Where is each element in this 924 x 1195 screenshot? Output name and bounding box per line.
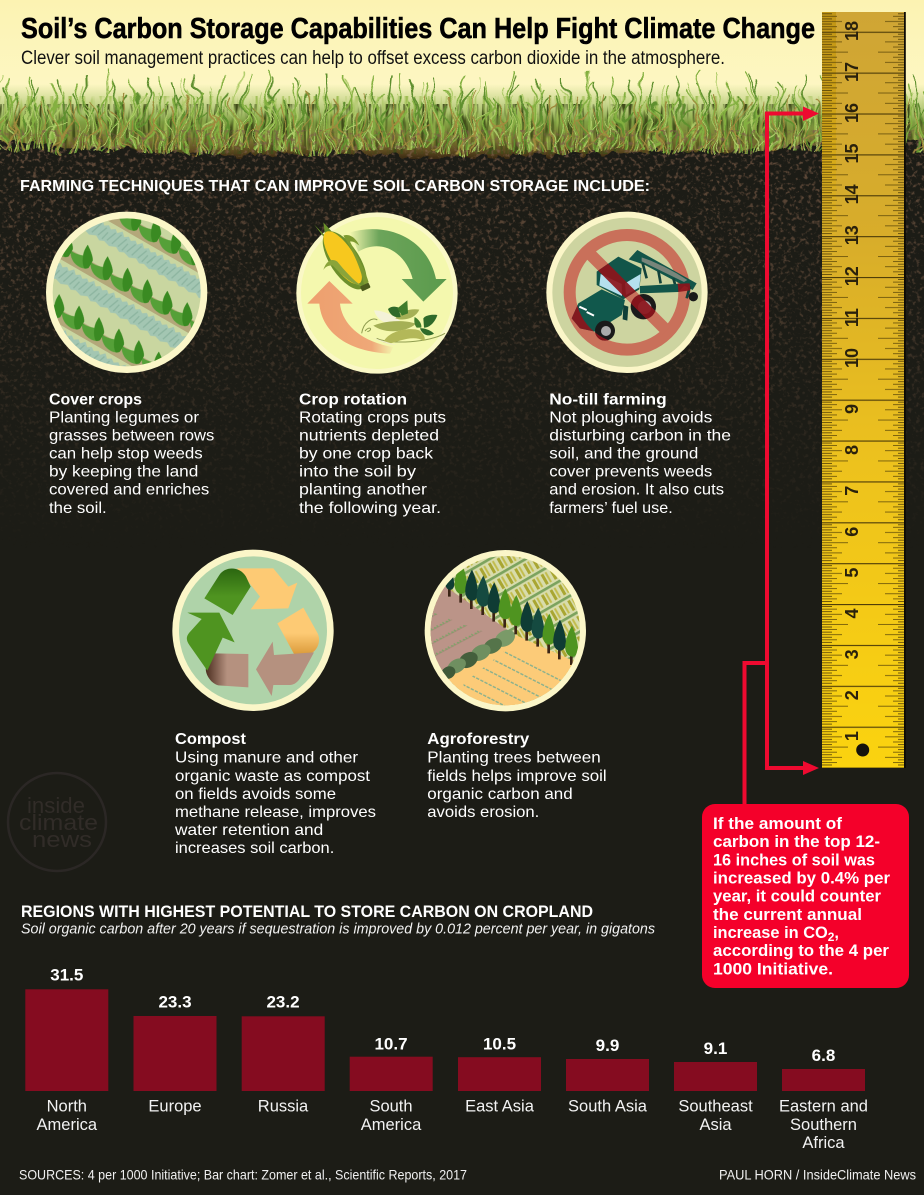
text: crop rotation: the following year.: [299, 500, 441, 517]
bar: North America: 31.5: [50, 965, 83, 984]
bar: Eastern and Southern Africa: 6.8: [812, 1046, 835, 1065]
bar: North America: America: [37, 1116, 98, 1134]
chart subtitle: Soil organic carbon after 20 years if sequestration is improved by 0.012 percent per year, in gigatons: [21, 920, 655, 937]
text: compost: on fields avoids some: [175, 786, 336, 803]
callout: 4 per 1000 Initiative: increased by 0.4% per: [713, 870, 891, 888]
callout: 4 per 1000 Initiative: [702, 804, 909, 988]
text: crop rotation: by one crop back: [299, 446, 434, 462]
text: cover crops: the soil.: [49, 500, 107, 517]
ruler numbers: 13: [842, 225, 862, 245]
sign over tractor: [572, 264, 690, 340]
text: cover crops: Planting legumes or: [49, 409, 200, 426]
icon: crop rotation: [296, 212, 458, 374]
text: no-till farming: disturbing carbon in the: [549, 427, 731, 444]
callout: 4 per 1000 Initiative: year, it could counter: [713, 888, 882, 906]
icon: cover crops: [46, 212, 207, 373]
bar: South America: 10.7: [374, 1034, 408, 1053]
bar: South Asia: South Asia: [568, 1098, 648, 1116]
bar: South Asia: 9.9: [596, 1036, 619, 1055]
bar: East Asia: 10.5: [483, 1034, 516, 1053]
sources: SOURCES: 4 per 1000 Initiative; Bar chart: Zomer et al., Scientific Reports, 2017: [19, 1166, 467, 1182]
hedge: [442, 630, 515, 679]
corn: [314, 222, 375, 296]
ruler numbers: 7: [842, 486, 862, 496]
bar: South Asia: [566, 1036, 649, 1116]
bar: East Asia: East Asia: [465, 1098, 535, 1116]
section heading: farming techniques: FARMING TECHNIQUES THAT CAN IMPROVE SOIL CARBON STORAGE INCLUDE:: [20, 178, 650, 195]
callout: 4 per 1000 Initiative: carbon in the top 12-: [713, 833, 880, 851]
text: agroforestry: Planting trees between: [427, 750, 601, 767]
bar: Eastern and Southern Africa: Southern: [790, 1116, 857, 1134]
bar: North America: North: [47, 1098, 87, 1116]
bar: East Asia: [458, 1034, 541, 1116]
ruler numbers: 14: [842, 184, 862, 204]
callout: 4 per 1000 Initiative: according to the 4 per: [713, 942, 890, 960]
text: compost: increases soil carbon.: [175, 840, 334, 857]
ruler numbers: 12: [842, 266, 862, 286]
ruler numbers: 6: [842, 527, 862, 537]
recycling piece: yellow right: [277, 608, 319, 654]
red arrows: 12-16 inch bracket: [744, 106, 819, 804]
recycling arrow: yellow top: [237, 568, 297, 609]
text: cover crops: Cover crops: [49, 391, 142, 408]
text: agroforestry: fields helps improve soil: [427, 768, 607, 785]
recycling piece: green top: [204, 568, 251, 615]
text: compost: Using manure and other: [175, 750, 359, 767]
ruler numbers: 8: [842, 445, 862, 455]
text: no-till farming: No-till farming: [549, 391, 667, 408]
green arrow: [350, 229, 447, 302]
ruler numbers: [842, 21, 862, 741]
text: crop rotation: [299, 391, 446, 517]
ruler numbers: 1: [842, 731, 862, 741]
callout: 4 per 1000 Initiative: If the amount of: [713, 815, 843, 833]
ruler numbers: 17: [842, 62, 862, 82]
bar: Russia: Russia: [258, 1098, 309, 1116]
text: crop rotation: Rotating crops puts: [299, 409, 446, 426]
ruler numbers: 15: [842, 143, 862, 164]
title: Soil’s Carbon Storage Capabilities Can Help Fight Climate Change: [21, 13, 815, 45]
text: no-till farming: soil, and the ground: [549, 446, 698, 462]
ruler numbers: 2: [842, 690, 862, 700]
text: crop rotation: planting another: [299, 482, 428, 499]
bar: Southeast Asia: Southeast: [678, 1098, 753, 1116]
orange arrow: [307, 281, 393, 354]
text: cover crops: [49, 391, 214, 517]
bar: Eastern and Southern Africa: Eastern and: [779, 1098, 868, 1116]
icon: compost: [172, 550, 334, 711]
callout: 4 per 1000 Initiative: increase in CO: [713, 924, 829, 942]
ruler numbers: 9: [842, 404, 862, 414]
text: no-till farming: farmers’ fuel use.: [549, 500, 673, 517]
text: agroforestry: avoids erosion.: [427, 804, 539, 821]
ruler numbers: 5: [842, 568, 862, 578]
ruler numbers: 18: [842, 21, 862, 41]
recycling arrow: tan lower: [256, 642, 314, 696]
bar: Europe: Europe: [148, 1098, 202, 1116]
text: agroforestry: Agroforestry: [427, 731, 529, 748]
text: compost: Compost: [175, 731, 247, 748]
ruler numbers: 10: [842, 348, 862, 368]
bar: Southeast Asia: Asia: [699, 1116, 732, 1134]
ruler numbers: 4: [842, 608, 862, 618]
bar chart: [25, 965, 868, 1152]
text: compost: [174, 731, 376, 857]
text: cover crops: covered and enriches: [49, 482, 209, 499]
text: crop rotation: Crop rotation: [299, 391, 407, 408]
text: compost: organic waste as compost: [175, 768, 371, 785]
text: cover crops: grasses between rows: [49, 427, 214, 444]
text: compost: methane release, improves: [175, 804, 376, 821]
bar: South America: South: [369, 1098, 413, 1116]
callout: 4 per 1000 Initiative: 1000 Initiative.: [713, 960, 833, 978]
text: no-till farming: [549, 391, 731, 517]
text: agroforestry: organic carbon and: [427, 786, 573, 803]
bar: Russia: 23.2: [266, 993, 300, 1012]
bar: Southeast Asia: [674, 1039, 757, 1134]
callout: 4 per 1000 Initiative: ,: [834, 924, 839, 942]
bar: Eastern and Southern Africa: [779, 1046, 868, 1152]
prohibition sign: [570, 235, 684, 350]
bar: South America: [350, 1034, 433, 1134]
text: agroforestry: [427, 731, 607, 821]
ruler: [822, 12, 906, 768]
ruler hole: [856, 744, 869, 756]
bar: South America: America: [361, 1116, 422, 1134]
callout: 4 per 1000 Initiative: the current annual: [713, 906, 862, 924]
icon: agroforestry: [425, 550, 587, 713]
tree line: [445, 563, 578, 665]
text: no-till farming: Not ploughing avoids: [549, 409, 712, 426]
watermark logo: [8, 773, 106, 871]
text: cover crops: by keeping the land: [49, 464, 198, 481]
subtitle: Clever soil management practices can help to offset excess carbon dioxide in the atmosphere.: [21, 48, 725, 69]
bar: Europe: [134, 993, 216, 1116]
text: crop rotation: nutrients depleted: [299, 427, 439, 444]
recycling piece: tan left: [206, 653, 248, 687]
text: crop rotation: into the soil by: [299, 464, 416, 481]
bar: Europe: 23.3: [158, 993, 192, 1012]
ruler numbers: 16: [842, 103, 862, 123]
ruler numbers: 11: [842, 308, 862, 327]
chart heading: REGIONS WITH HIGHEST POTENTIAL TO STORE CARBON ON CROPLAND: [21, 903, 593, 921]
watermark logo: inside: [27, 793, 85, 818]
bar: Eastern and Southern Africa: Africa: [802, 1134, 845, 1152]
callout: 4 per 1000 Initiative: 16 inches of soil was: [713, 851, 875, 869]
callout: 4 per 1000 Initiative: 2: [828, 930, 835, 944]
bar: Russia: [242, 993, 325, 1116]
bar: North America: [25, 965, 108, 1134]
watermark logo: climate: [19, 810, 98, 835]
ruler numbers: 3: [842, 649, 862, 659]
text: no-till farming: and erosion. It also cuts: [549, 482, 724, 499]
soybeans: [362, 300, 445, 345]
text: no-till farming: cover prevents weeds: [549, 464, 712, 481]
text: cover crops: can help stop weeds: [49, 446, 203, 462]
watermark logo: news: [32, 827, 92, 852]
tractor: [572, 250, 698, 341]
recycling arrow: green left: [187, 613, 235, 671]
bar: Southeast Asia: 9.1: [704, 1039, 727, 1058]
soil texture: [0, 130, 924, 490]
icon: no-till farming: [546, 212, 708, 373]
text: compost: water retention and: [174, 822, 323, 839]
